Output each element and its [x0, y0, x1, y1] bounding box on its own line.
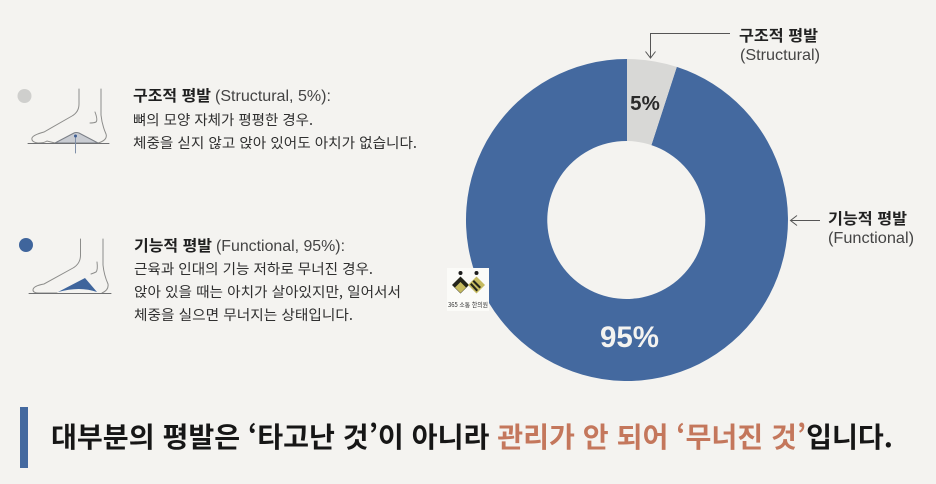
callout: structural label with arrow	[646, 24, 820, 64]
text: functional description: 기능적 평발	[134, 234, 212, 256]
callout: structural label with arrow: (Structural)	[740, 47, 820, 64]
chart: donut chart	[466, 59, 788, 381]
text: functional description: 체중을 실으면 무너지는 상태입니다.	[134, 305, 353, 325]
callout: functional label with arrow: (Functional)	[828, 230, 914, 247]
callout: structural label with arrow: 구조적 평발	[739, 24, 818, 46]
text: functional description	[134, 234, 401, 325]
heading: key takeaway: 대부분의 평발은 ‘타고난 것’이 아니라 관리가 안 되어 ‘무너진 것’입니다.	[51, 416, 893, 456]
label: 5 percent: 5%	[630, 92, 660, 115]
text: functional description: 앉아 있을 때는 아치가 살아있지만, 일어서서	[134, 282, 401, 302]
text: structural description: 구조적 평발	[133, 84, 211, 106]
icon: structural flat foot	[28, 89, 109, 153]
text: functional description: (Functional, 95%):	[216, 238, 345, 255]
icon: functional marker dot	[19, 238, 33, 252]
icon: structural marker dot	[18, 89, 32, 103]
label: 95 percent: 95%	[600, 321, 659, 354]
icon: functional collapsed foot	[29, 239, 111, 294]
text: structural description	[133, 84, 417, 153]
logo: 365 clinic badge: 365 소통 한의원	[448, 299, 488, 309]
accent bar	[20, 407, 28, 468]
text: structural description: (Structural, 5%):	[215, 88, 331, 105]
text: functional description: 근육과 인대의 기능 저하로 무너진 경우.	[134, 259, 373, 279]
callout: functional label with arrow	[790, 207, 914, 247]
callout: functional label with arrow: 기능적 평발	[828, 207, 907, 229]
logo: 365 clinic badge	[447, 268, 489, 311]
text: structural description: 체중을 싣지 않고 앉아 있어도 아치가 없습니다.	[133, 133, 417, 153]
text: structural description: 뼈의 모양 자체가 평평한 경우.	[133, 110, 313, 130]
